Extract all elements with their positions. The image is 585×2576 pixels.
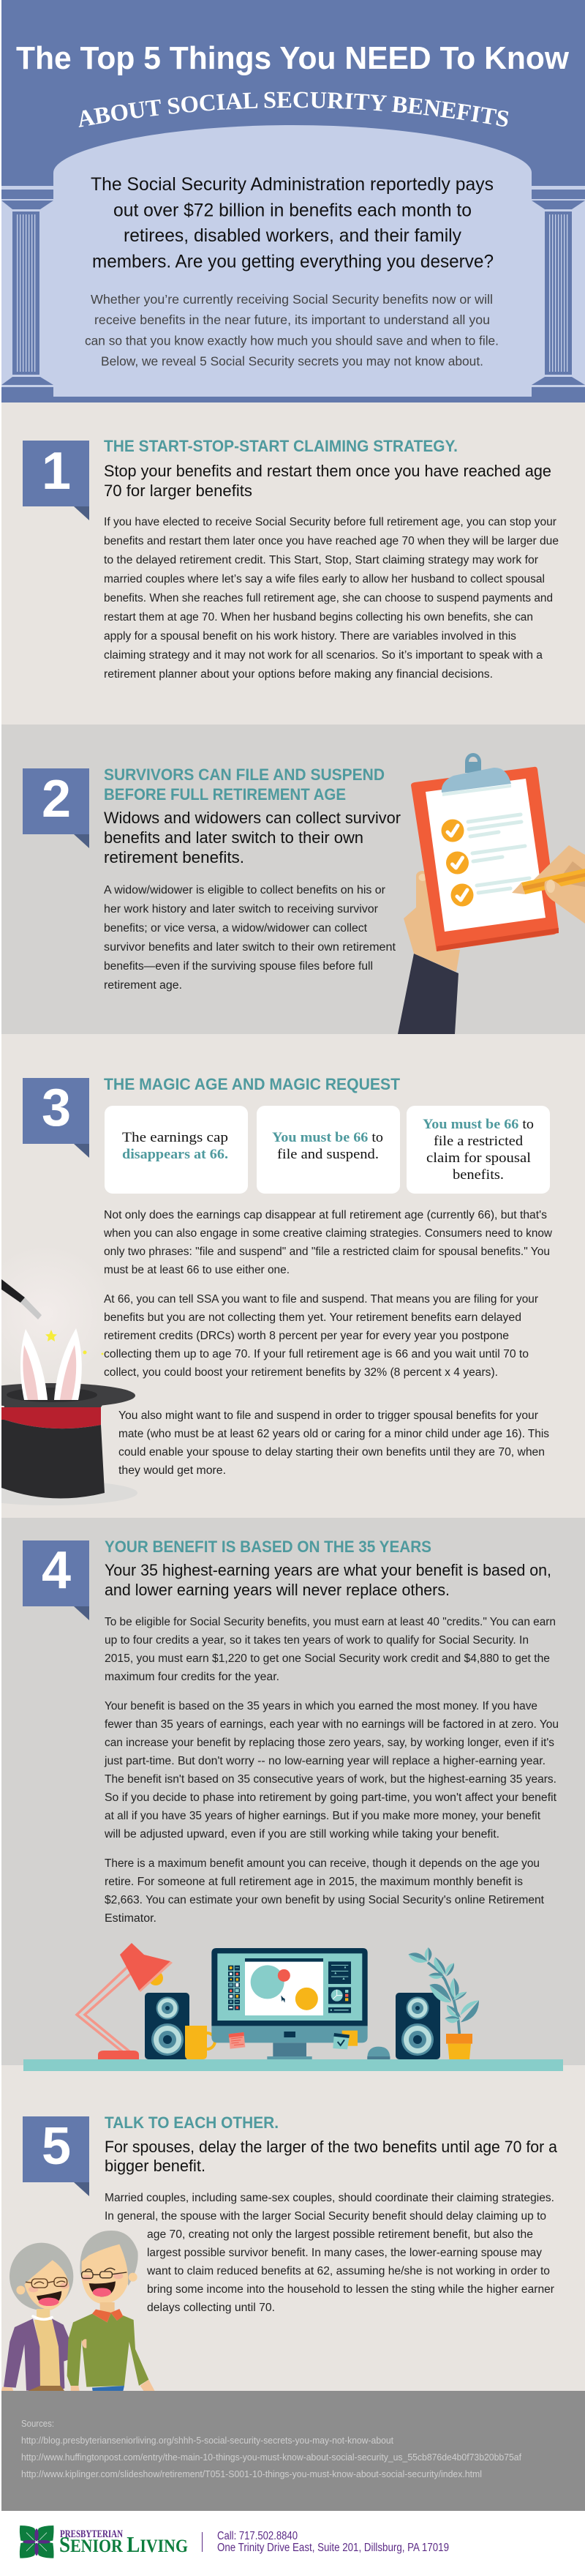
body 3b: collecting them up to age 70. If your full retirement age is 66 and you wait until 70 to [104,1348,529,1360]
illustration: laughing senior couple [1,2231,155,2391]
intro body [85,292,499,369]
body 5: delays collecting until 70. [147,2302,275,2314]
logo wordmark: PRESBYTERIAN [60,2528,123,2540]
panel: section 3 background [0,1034,585,1518]
lamp [77,1943,173,2059]
panel: section 4 background [0,1518,585,2065]
badge 3: 3 [42,1079,71,1137]
body 4: Estimator. [105,1912,156,1925]
subheading 5 [105,2138,558,2175]
body 3b: At 66, you can tell SSA you want to file and suspend. That means you are filing for your [104,1293,538,1306]
column: right [532,190,585,397]
body 4: up to four credits a year, so it takes ten years of work to qualify for Social Security. In [105,1634,529,1647]
computer monitor [211,1948,390,2059]
subtitle on arc: ABOUT SOCIAL SECURITY BENEFITS [79,92,509,127]
heading 2 [104,765,385,804]
heading 4: YOUR BENEFIT IS BASED ON THE 35 YEARS [105,1538,431,1556]
body 4: There is a maximum benefit amount you can receive, though it depends on the age you [105,1857,540,1870]
woman [1,2243,73,2391]
badge 1 [23,441,89,520]
illustration: clipboard and hands [398,753,585,1034]
badge 2 [23,768,89,848]
logo wordmark: SENIOR LIVING [59,2531,188,2557]
card: file and suspend: You must be 66 to [272,1130,383,1145]
body 1 [104,516,559,681]
subheading 1: 70 for larger benefits [104,482,252,500]
body 5: age 70, creating not only the largest possible retirement benefit, but also the [147,2228,533,2241]
badge 4 [23,1540,89,1620]
panel: sources: http://blog.presbyterianseniorliving.org/shhh-5-social-security-secrets-you-may-not-know-about [21,2435,394,2446]
subheading 2: benefits and later switch to their own [104,828,363,847]
body 1: claiming strategy and it may not work for all scenarios. So it’s important to speak with a [104,649,543,662]
body 4: Your benefit is based on the 35 years in which you earned the most money. If you have [105,1700,537,1712]
contact details: Call: 717.502.8840 [217,2530,298,2542]
intro statement: members. Are you getting everything you deserve? [92,252,494,272]
body 5: largest possible survivor benefit. In many cases, the lower-earning spouse may [147,2247,542,2259]
body 4: The benefit isn't based on 35 consecutive years of work, but the highest-earning 35 years. [105,1773,556,1786]
body 4: $2,663. You can estimate your own benefit by using Social Security's online Retirement [105,1894,545,1906]
body 3c: You also might want to file and suspend in order to trigger spousal benefits for your [118,1409,538,1422]
body 5: Married couples, including same-sex couples, should coordinate their claiming strategies. [105,2192,554,2204]
card: restricted claim: benefits. [453,1167,504,1183]
body 4: So if you decide to phase into retirement by going part-time, you won't affect your benefit [105,1791,557,1804]
intro statement [91,174,494,272]
body 4: retire. For someone at full retirement age in 2015, the maximum monthly benefit is [105,1876,523,1888]
arch panel [53,125,532,397]
subheading 2: Widows and widowers can collect survivor [104,809,401,827]
body 1: restart them at age 70. When her husband begins collecting his own benefits, she can [104,611,533,624]
subheading 2 [104,809,401,866]
intro statement: The Social Security Administration reportedly pays [91,174,494,195]
intro statement: retirees, disabled workers, and their family [124,225,461,246]
body 4: just part-time. But don't worry -- no low-earning year will replace a higher-earning year. [104,1755,546,1767]
body 2: A widow/widower is eligible to collect benefits on his or [104,884,385,896]
body 2 [104,884,396,992]
panel: sources: http://www.huffingtonpost.com/entry/the-main-10-things-you-must-know-about-social-security_us_55cb876de4b0f73b20bb75af [21,2452,522,2463]
body 4: To be eligible for Social Security benefits, you must earn at least 40 "credits." You can earn [105,1616,556,1628]
card: file and suspend: file and suspend. [277,1147,379,1162]
contact details [217,2530,449,2554]
body 1: to the delayed retirement credit. This Start, Stop, Start claiming strategy may work for [104,554,538,566]
body 1: benefits. When she reaches full retirement age, she can choose to suspend payments and [104,592,553,604]
body 4: 2015, you must earn $1,220 to get one Social Security work credit and $4,880 to get the [105,1652,550,1665]
subheading 1 [104,462,551,500]
contact details: One Trinity Drive East, Suite 201, Dillsburg, PA 17019 [217,2542,449,2554]
body 3c: could enable your spouse to delay starting their own benefits until they are 70, when [118,1446,545,1459]
body 2: retirement age. [104,979,182,992]
card: restricted claim: file a restricted [434,1134,524,1149]
body 4: maximum four credits for the year. [105,1671,279,1683]
badge 5: 5 [42,2117,71,2176]
subheading 5: bigger benefit. [105,2157,205,2175]
card: file and suspend [257,1106,400,1194]
title: The Top 5 Things You NEED To Know [16,40,570,76]
body 5: In general, the spouse with the larger Social Security benefit should delay claiming up to [105,2210,546,2223]
potted plant [408,1947,479,2059]
body 4: fewer than 35 years of earnings, each year with no earnings will be factored in at zero. You [105,1718,559,1731]
subheading 5: For spouses, delay the larger of the two benefits until age 70 for a [105,2138,558,2156]
illustration: desk with computer [23,1943,563,2071]
panel: section 2 background [0,724,585,1034]
subheading 4: Your 35 highest-earning years are what your benefit is based on, [105,1561,551,1579]
card: earnings cap: The earnings cap [122,1130,228,1145]
subheading 1: Stop your benefits and restart them once you have reached age [104,462,551,480]
badge 3 [23,1078,89,1158]
body 4 [104,1616,559,1925]
body 3b: collect, you could boost your retirement benefits by 32% (8 percent x 4 years). [104,1366,498,1379]
body 1: If you have elected to receive Social Security before full retirement age, you can stop your [104,516,556,528]
card: earnings cap: disappears at 66. [122,1147,228,1162]
body 3c: they would get more. [118,1464,226,1477]
body 1: benefits and restart them later once you have reached age 70 when they will be larger due [104,535,559,547]
badge 5 [23,2116,89,2196]
body 4: at all if you have 35 years of higher earnings. But if you make more money, your benefit [105,1810,541,1822]
panel: header [0,0,585,402]
body 4: can increase your benefit by replacing those zero years, say, by working longer, even if it's [105,1737,554,1749]
column: left [0,190,53,397]
shelf [23,2059,563,2071]
body 4: will be adjusted upward, even if you are still working while taking your benefit. [104,1828,499,1841]
card: earnings cap [105,1106,248,1194]
intro body: Below, we reveal 5 Social Security secrets you may not know about. [101,354,483,369]
body 3b: benefits but you are not collecting them yet. Your retirement benefits earn delayed [104,1311,521,1324]
body 3a: must be at least 66 to use either one. [104,1264,290,1276]
speaker right [396,1993,440,2059]
logo mark [20,2526,54,2558]
body 3c: mate (who must be at least 62 years old or caring for a minor child under age 16). This [118,1428,549,1440]
heading 1: THE START-STOP-START CLAIMING STRATEGY. [104,437,458,455]
subheading 2: retirement benefits. [104,848,244,866]
panel: sources: http://www.kiplinger.com/slideshow/retirement/T051-S001-10-things-you-must-know-about-social-security/index.html [21,2469,482,2479]
body 1: married couples where let’s say a wife files early to allow her husband to collect spousal [104,573,545,585]
heading 2: BEFORE FULL RETIREMENT AGE [104,785,346,804]
body 2: her work history and later switch to receiving survivor [104,903,378,916]
body 3a: Not only does the earnings cap disappear at full retirement age (currently 66), but that's [104,1209,547,1221]
man [67,2231,155,2391]
mug [185,2026,215,2059]
body 3c [118,1409,549,1477]
heading 3: THE MAGIC AGE AND MAGIC REQUEST [104,1075,401,1093]
body 3b: retirement credits (DRCs) worth 8 percent per year for every year you postpone [104,1330,509,1342]
heading 5: TALK TO EACH OTHER. [105,2113,279,2132]
body 5: want to claim reduced benefits at 62, assuming he/she is not working in order to [146,2265,550,2277]
card: restricted claim: You must be 66 to [423,1117,534,1132]
body 3a: when you can also engage in some creative claiming strategies. Consumers need to know [103,1227,553,1240]
heading 2: SURVIVORS CAN FILE AND SUSPEND [104,765,385,784]
panel: section 5 background [0,2065,585,2391]
intro body: Whether you’re currently receiving Social Security benefits now or will [91,292,493,307]
badge 2: 2 [42,770,71,828]
panel: sources [0,2391,585,2511]
body 2: benefits; or vice versa, a widow/widower can collect [104,922,368,935]
intro statement: out over $72 billion in benefits each month to [113,201,472,221]
body 2: survivor benefits and later switch to their own retirement [104,941,396,954]
card: restricted claim [407,1106,550,1194]
body 5: bring some income into the household to lessen the sting while the higher earner [147,2283,554,2296]
subheading 4 [105,1561,551,1599]
intro body: can so that you know exactly how much you should save and when to file. [85,334,499,348]
body 2: benefits—even if the surviving spouse files before full [104,960,373,973]
body 1: retirement planner about your options before making any financial decisions. [104,668,493,681]
panel: sources: Sources: [21,2419,54,2429]
badge 4: 4 [42,1541,71,1600]
panel: section 1 background [0,402,585,724]
intro body: receive benefits in the near future, its important to understand all you [94,312,490,327]
body 1: apply for a spousal benefit on his work history. There are variables involved in this [104,630,516,643]
body 3a: only two phrases: "file and suspend" and "file a restricted claim for spousal benefits." You [104,1246,550,1258]
body 3a [103,1209,553,1276]
speaker left [145,1993,189,2059]
card: restricted claim: claim for spousal [426,1150,531,1166]
body 5 [105,2192,554,2314]
footer divider [202,2532,203,2552]
badge 1: 1 [42,442,71,501]
illustration: magic hat and rabbit ears [0,1244,137,1505]
subheading 4: and lower earning years will never replace others. [105,1581,450,1599]
body 3b [104,1293,538,1379]
